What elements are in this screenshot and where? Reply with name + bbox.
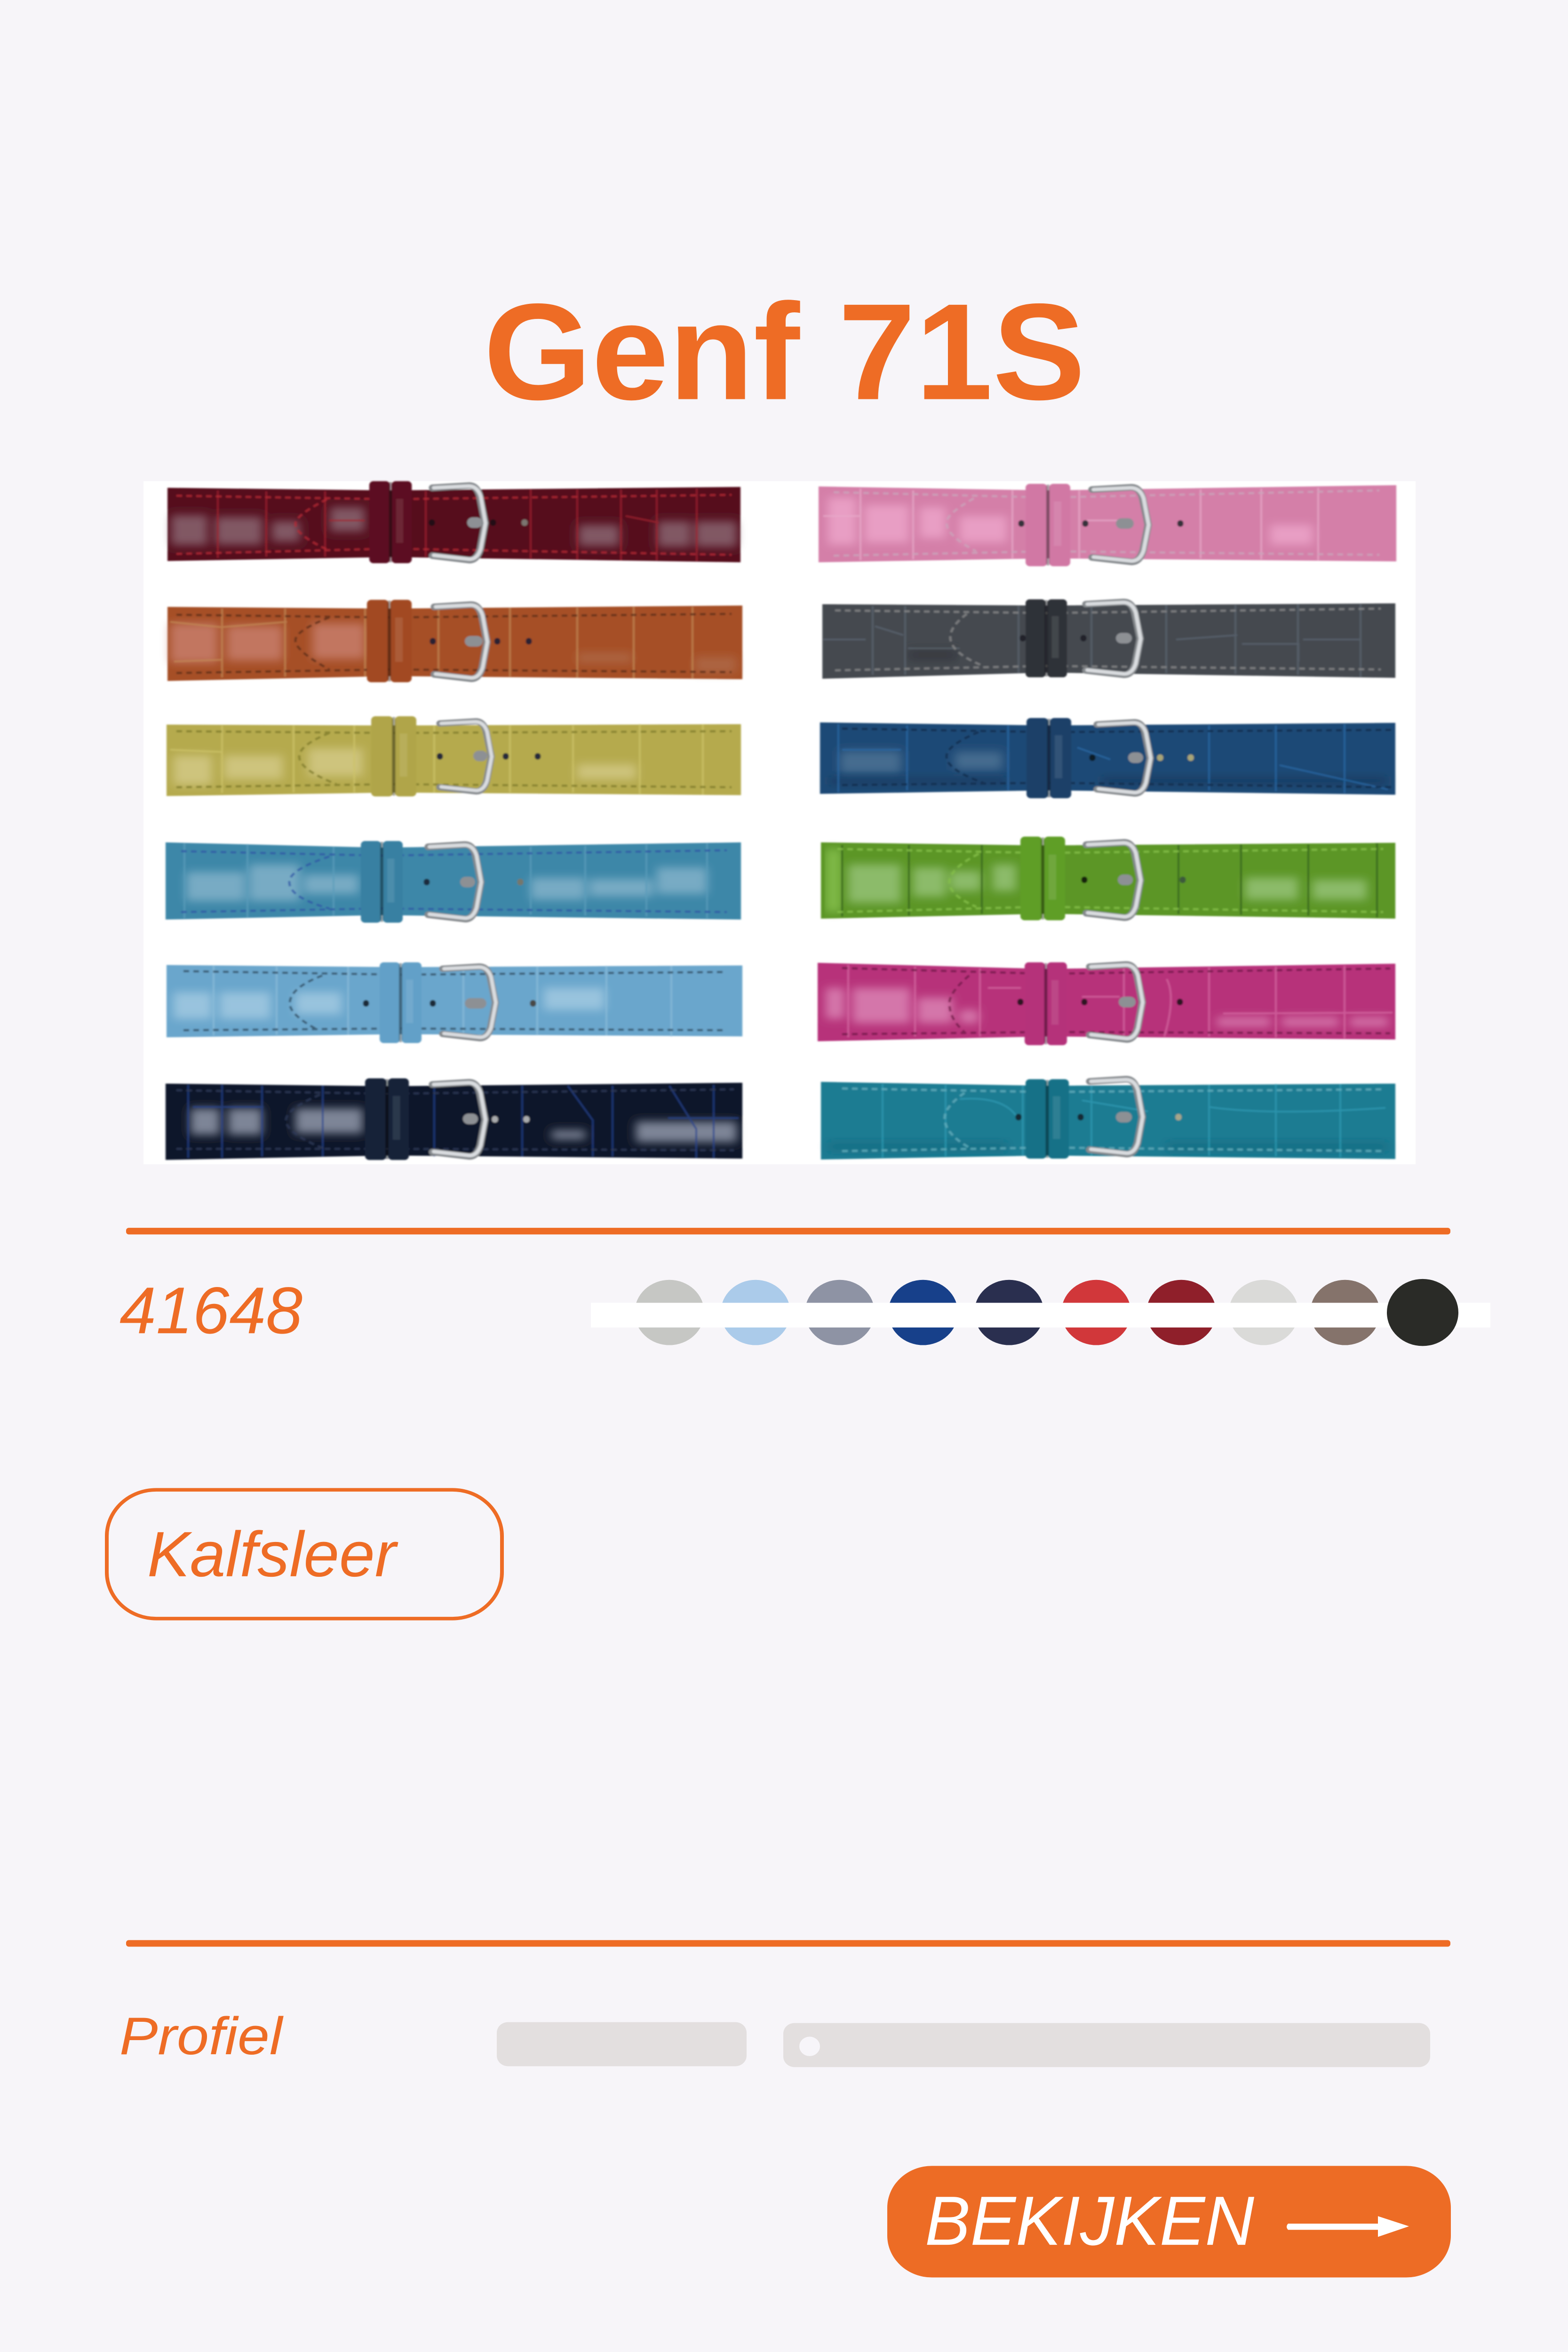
article number: 41648	[119, 1273, 302, 1347]
divider line top	[126, 1228, 1450, 1234]
title: Genf 71S	[484, 275, 1085, 428]
panel: watch straps photo	[143, 481, 1416, 1164]
button: BEKIJKEN: BEKIJKEN	[925, 2182, 1254, 2260]
profile icon: short bar	[497, 2022, 747, 2066]
icon: arrow	[1287, 2216, 1409, 2237]
divider line bottom	[126, 1940, 1450, 1947]
strap: lime green	[821, 837, 1395, 920]
material tag: Kalfsleer: Kalfsleer	[147, 1518, 398, 1590]
strap: navy blue	[820, 718, 1395, 798]
strap: petrol blue patent	[166, 841, 741, 922]
profile icon: long bar with hole	[783, 2023, 1430, 2067]
button: BEKIJKEN	[887, 2166, 1451, 2278]
strap: brown	[167, 600, 742, 682]
material tag: Kalfsleer	[107, 1490, 502, 1619]
strap: pink	[819, 484, 1396, 566]
strap: burgundy	[167, 481, 740, 563]
strap: light blue	[167, 962, 742, 1043]
strap: teal	[821, 1079, 1395, 1160]
strap: glossy black	[166, 1078, 742, 1160]
colour swatches	[591, 1279, 1490, 1346]
profile label: Profiel	[119, 2007, 284, 2066]
strap: yellow	[167, 716, 741, 796]
strap: anthracite grey	[822, 599, 1395, 679]
strap: magenta	[818, 962, 1395, 1045]
